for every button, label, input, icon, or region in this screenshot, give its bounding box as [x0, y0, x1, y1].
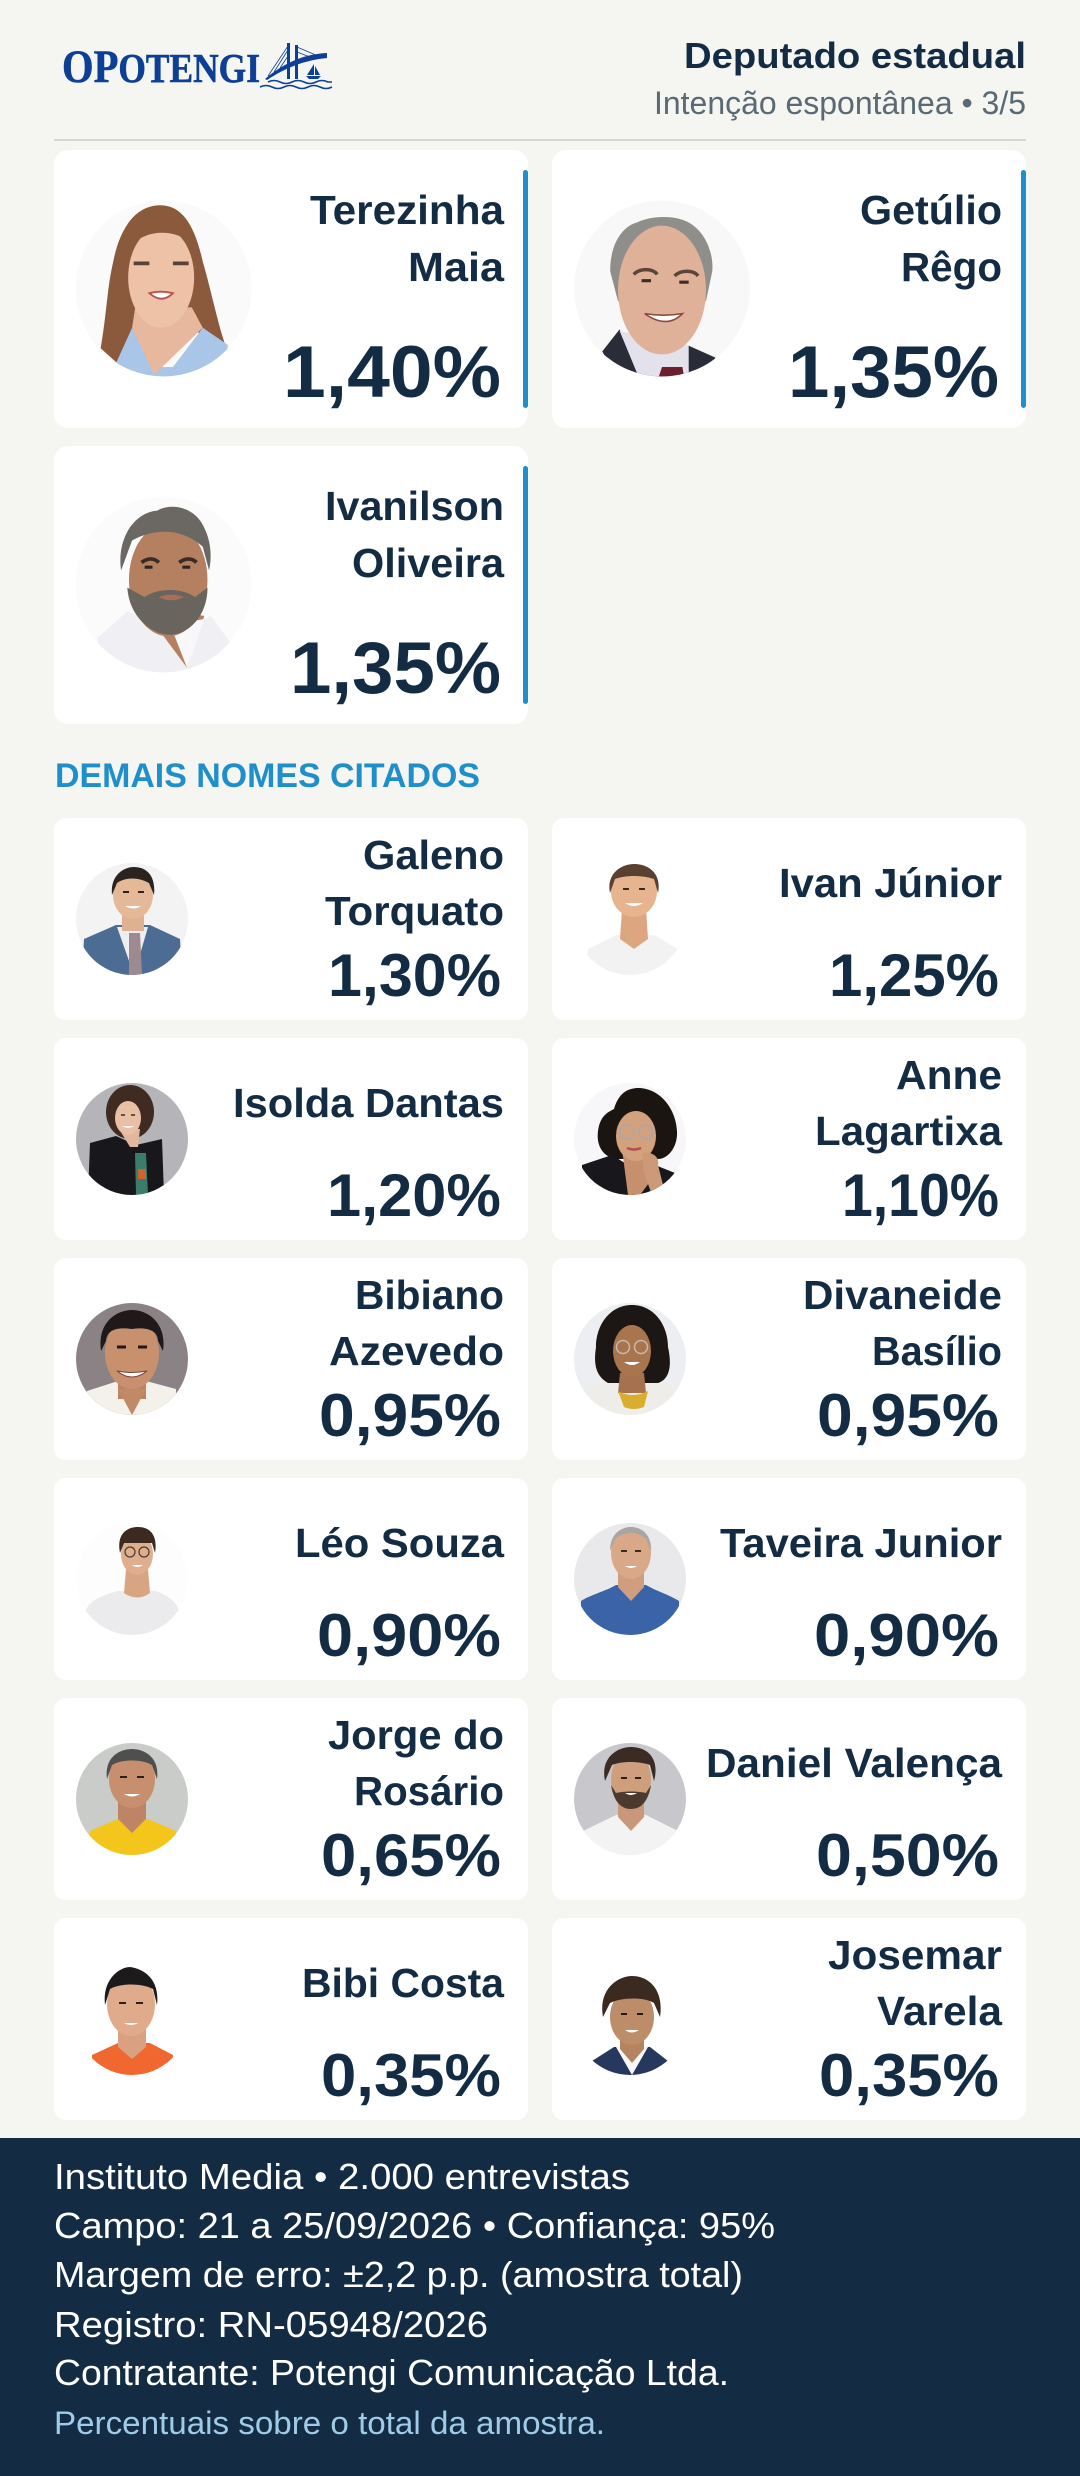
panel: Bibi Costa [54, 1918, 528, 2120]
avatar: Léo Souza [86, 1527, 178, 1635]
panel: Jorge do Rosário [54, 1698, 528, 1900]
panel: Anne Lagartixa [552, 1038, 1026, 1240]
name: Bibiano Azevedo [329, 1272, 504, 1374]
name: Divaneide Basílio [803, 1272, 1002, 1374]
value: 0,65%: 0,65% [321, 1822, 501, 1889]
name: Ivanilson Oliveira: Oliveira [352, 540, 505, 586]
avatar: Jorge do Rosário [76, 1743, 188, 1855]
name: Josemar Varela: Josemar [828, 1932, 1002, 1978]
name: Getúlio Rêgo: Getúlio [860, 187, 1002, 233]
name: Josemar Varela [828, 1932, 1003, 2034]
name: Divaneide Basílio: Basílio [872, 1328, 1002, 1374]
value: 1,10%: 1,10% [842, 1162, 999, 1229]
text: note: Percentuais sobre o total da amostra. [54, 2405, 605, 2441]
name: Isolda Dantas: Isolda Dantas [233, 1080, 504, 1126]
panel: Isolda Dantas [54, 1038, 528, 1240]
name: Taveira Junior: Taveira Junior [720, 1520, 1002, 1566]
subtitle: Intenção espontânea: Intenção espontânea • 3/5 [654, 85, 1026, 121]
name: Anne Lagartixa: Anne [896, 1052, 1002, 1098]
value: 0,95%: 0,95% [817, 1382, 999, 1449]
avatar: Josemar Varela [592, 1976, 668, 2075]
avatar: Ivan Júnior [588, 864, 678, 975]
value: 1,35%: 1,35% [290, 628, 501, 709]
text: registration: Registro: RN-05948/2026 [54, 2304, 488, 2345]
value: 1,25%: 1,25% [829, 942, 999, 1009]
avatar: Bibi Costa [92, 1967, 173, 2075]
name: Josemar Varela: Varela [877, 1988, 1003, 2034]
name: Ivanilson Oliveira: Ivanilson [325, 483, 504, 529]
avatar: Bibiano Azevedo [76, 1303, 188, 1415]
value: 0,50%: 0,50% [816, 1822, 999, 1889]
panel: Getúlio Rêgo [552, 150, 1026, 428]
panel: Josemar Varela [552, 1918, 1026, 2120]
avatar: Daniel Valença [574, 1743, 686, 1855]
value: 1,40%: 1,40% [283, 332, 501, 413]
avatar: Ivanilson Oliveira [98, 506, 230, 672]
panel: Galeno Torquato [54, 818, 528, 1020]
avatar: Getúlio Rêgo [602, 217, 716, 376]
section heading: Demais nomes citados: DEMAIS NOMES CITADOS [55, 757, 480, 795]
value: 1,35%: 1,35% [788, 332, 999, 413]
avatar: Anne Lagartixa [582, 1088, 678, 1195]
avatar: Divaneide Basílio [574, 1303, 686, 1415]
panel: Terezinha Maia [54, 150, 528, 428]
name: Divaneide Basílio: Divaneide [803, 1272, 1002, 1318]
value: 1,20%: 1,20% [327, 1162, 501, 1229]
panel: Taveira Junior [552, 1478, 1026, 1680]
value: 0,35%: 0,35% [321, 2042, 501, 2109]
value: 0,95%: 0,95% [319, 1382, 501, 1449]
name: Ivan Júnior: Ivan Júnior [779, 860, 1002, 906]
avatar: Terezinha Maia [100, 205, 228, 376]
text: institute: Instituto Media • 2.000 entrevistas [54, 2156, 630, 2197]
panel: Divaneide Basílio [552, 1258, 1026, 1460]
text: contractor: Contratante: Potengi Comunicação Ltda. [54, 2352, 729, 2393]
value: 0,90%: 0,90% [814, 1602, 999, 1669]
text: margin of error: Margem de erro: ±2,2 p.p. (amostra total) [54, 2254, 743, 2295]
avatar: Taveira Junior [574, 1523, 686, 1635]
avatar: Galeno Torquato [76, 863, 188, 975]
name: Getúlio Rêgo [860, 187, 1002, 290]
value: 0,90%: 0,90% [317, 1602, 501, 1669]
name: Terezinha Maia [310, 187, 505, 290]
name: Jorge do Rosário: Jorge do [328, 1712, 504, 1758]
name: Léo Souza: Léo Souza [295, 1520, 505, 1566]
name: Bibi Costa: Bibi Costa [302, 1960, 505, 2006]
name: Bibiano Azevedo: Azevedo [329, 1328, 504, 1374]
name: Terezinha Maia: Maia [408, 244, 505, 290]
panel: Daniel Valença [552, 1698, 1026, 1900]
logo: O Potengi: OPOTENGI [62, 41, 260, 93]
panel: footer [0, 2138, 1080, 2476]
name: Bibiano Azevedo: Bibiano [355, 1272, 504, 1318]
name: Daniel Valença: Daniel Valença [706, 1740, 1003, 1786]
avatar: Isolda Dantas [76, 1083, 188, 1195]
text: field dates: Campo: 21 a 25/09/2026 • Confiança: 95% [54, 2205, 775, 2246]
name: Galeno Torquato: Torquato [325, 888, 504, 934]
name: Ivanilson Oliveira [325, 483, 505, 586]
name: Galeno Torquato [325, 832, 504, 934]
name: Galeno Torquato: Galeno [363, 832, 504, 878]
panel: Ivan Júnior [552, 818, 1026, 1020]
name: Jorge do Rosário [328, 1712, 504, 1814]
panel: Bibiano Azevedo [54, 1258, 528, 1460]
name: Terezinha Maia: Terezinha [310, 187, 505, 233]
name: Anne Lagartixa: Lagartixa [815, 1108, 1003, 1154]
value: 1,30%: 1,30% [328, 942, 501, 1009]
value: 0,35%: 0,35% [819, 2042, 999, 2109]
panel: Léo Souza [54, 1478, 528, 1680]
name: Getúlio Rêgo: Rêgo [901, 244, 1002, 290]
name: Jorge do Rosário: Rosário [354, 1768, 504, 1814]
name: Anne Lagartixa [815, 1052, 1003, 1154]
panel: Ivanilson Oliveira [54, 446, 528, 724]
heading: Deputado estadual: Deputado estadual [684, 35, 1026, 76]
